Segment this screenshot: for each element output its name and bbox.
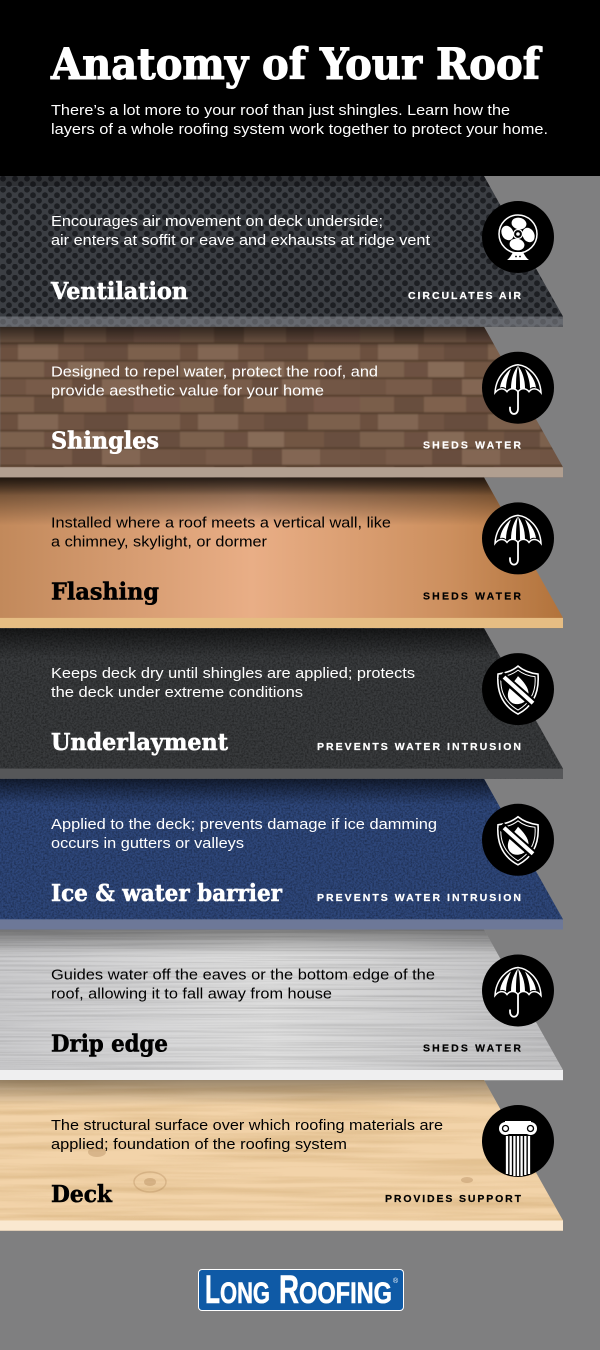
- icon: shield: [482, 804, 554, 876]
- flashing description: Installed where a roof meets a vertical wall, like: [51, 514, 391, 531]
- flashing heading: Flashing: [51, 577, 159, 605]
- intro text: There’s a lot more to your roof than just shingles. Learn how the: [51, 102, 510, 119]
- underlayment description: the deck under extreme conditions: [51, 684, 303, 701]
- panel: ventilation: [0, 176, 600, 327]
- deck heading: Deck: [51, 1180, 113, 1208]
- panel: deck: [0, 1080, 600, 1231]
- underlayment heading: Underlayment: [51, 728, 228, 756]
- icon: umbrella: [482, 502, 554, 574]
- logo: Long Roofing: ®: [393, 1277, 399, 1285]
- ice and water barrier tag: PREVENTS WATER INTRUSION: [317, 892, 521, 904]
- logo: Long Roofing: OOFING: [299, 1277, 392, 1310]
- flashing description: a chimney, skylight, or dormer: [51, 533, 267, 550]
- ventilation heading: Ventilation: [50, 277, 188, 305]
- flashing tag: SHEDS WATER: [423, 590, 521, 602]
- logo: Long Roofing: L: [205, 1268, 220, 1312]
- flashing description: [51, 514, 391, 550]
- drip edge description: Guides water off the eaves or the bottom edge of the: [51, 966, 435, 984]
- icon: shield: [482, 653, 554, 725]
- title: Anatomy of Your Roof: [50, 40, 542, 90]
- ice and water barrier description: occurs in gutters or valleys: [51, 835, 244, 852]
- header panel: [0, 0, 600, 176]
- shingles description: [51, 364, 378, 400]
- panel: shingles: [0, 327, 600, 478]
- shingles description: provide aesthetic value for your home: [51, 383, 324, 400]
- ventilation description: [51, 213, 431, 249]
- deck description: [51, 1117, 443, 1153]
- logo: Long Roofing: ONG: [220, 1277, 270, 1310]
- deck description: The structural surface over which roofing materials are: [51, 1117, 443, 1134]
- shingles description: Designed to repel water, protect the roof, and: [51, 364, 378, 381]
- logo: Long Roofing: [198, 1268, 404, 1312]
- ventilation description: air enters at soffit or eave and exhausts at ridge vent: [51, 232, 431, 249]
- drip edge description: [51, 966, 435, 1002]
- icon: column: [482, 1105, 554, 1177]
- underlayment description: Keeps deck dry until shingles are applied; protects: [51, 665, 415, 682]
- icon: umbrella: [482, 352, 554, 424]
- drip edge description: roof, allowing it to fall away from house: [51, 986, 332, 1002]
- icon: umbrella: [482, 954, 554, 1026]
- logo: Long Roofing: R: [279, 1268, 299, 1312]
- underlayment tag: PREVENTS WATER INTRUSION: [317, 741, 521, 753]
- drip edge heading: Drip edge: [51, 1030, 168, 1058]
- ice and water barrier description: [51, 816, 437, 852]
- ventilation description: Encourages air movement on deck underside;: [51, 213, 383, 230]
- panel: drip edge: [0, 930, 600, 1080]
- panel: ice and water barrier: [0, 779, 600, 930]
- underlayment description: [51, 665, 415, 701]
- drip edge tag: SHEDS WATER: [423, 1042, 521, 1054]
- shingles heading: Shingles: [51, 427, 159, 455]
- ice and water barrier heading: Ice & water barrier: [51, 879, 283, 907]
- icon: fan: [482, 201, 554, 273]
- panel: flashing: [0, 477, 600, 628]
- ice and water barrier description: Applied to the deck; prevents damage if ice damming: [51, 816, 437, 833]
- deck tag: PROVIDES SUPPORT: [385, 1193, 522, 1205]
- panel: underlayment: [0, 628, 600, 779]
- ventilation tag: CIRCULATES AIR: [408, 290, 521, 302]
- deck description: applied; foundation of the roofing system: [51, 1136, 347, 1153]
- shingles tag: SHEDS WATER: [423, 440, 521, 452]
- intro text: [51, 102, 548, 138]
- intro text: layers of a whole roofing system work together to protect your home.: [51, 121, 548, 138]
